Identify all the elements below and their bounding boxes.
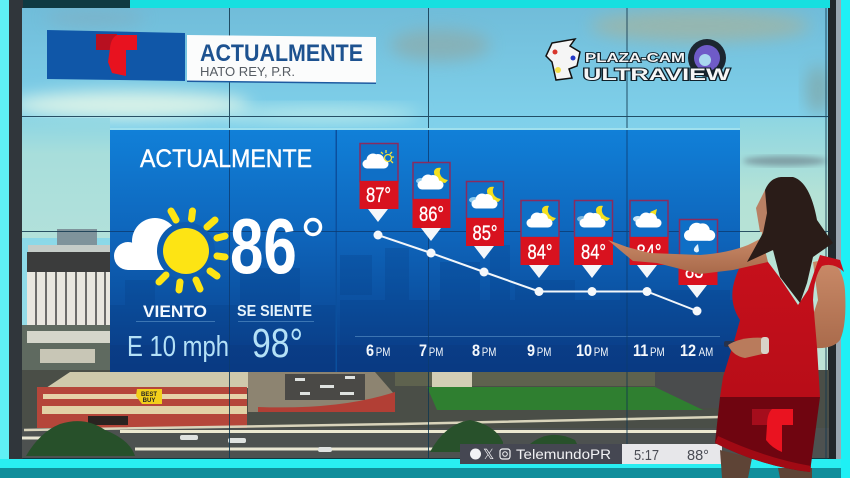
dress lower dark overlay (715, 397, 820, 472)
line chart: hourly temperature (374, 230, 702, 316)
hair (747, 177, 833, 303)
forecast 6 PM (360, 144, 398, 222)
forecast 7 PM: 86° (419, 203, 444, 226)
video wall sky background (22, 8, 828, 370)
lower third ticker (460, 444, 722, 464)
trees (26, 421, 135, 456)
forecast 8 PM (466, 182, 504, 259)
presenter (608, 177, 845, 478)
forecast 9 PM (520, 200, 560, 278)
hour labels: 6PM (366, 342, 390, 360)
forecast 9 PM: 84° (528, 241, 552, 264)
forecast 6 PM: 87° (366, 184, 391, 207)
logo: Plaza-Cam Ultraview (546, 39, 731, 84)
forecast 7 PM (412, 162, 450, 241)
far arm (765, 261, 845, 353)
logo: Telemundo T on dress (752, 409, 793, 452)
title banner: ACTUALMENTE (200, 40, 363, 67)
forecast 11 PM (630, 200, 668, 278)
hour labels: 11PM (633, 342, 665, 360)
hour labels: 9PM (527, 342, 551, 360)
panel: forecast background (110, 128, 740, 372)
current temperature: 86 (230, 202, 297, 290)
feels-like label: SE SIENTE (237, 303, 312, 320)
green field (427, 387, 703, 410)
parking structure (248, 372, 395, 412)
pointing arm (608, 238, 768, 274)
logo: Plaza-Cam Ultraview: ULTRAVIEW (583, 65, 731, 84)
lower third ticker: TelemundoPR (516, 446, 611, 462)
watch (761, 337, 769, 354)
store roof (46, 372, 248, 388)
wind label: VIENTO (143, 302, 207, 321)
face (756, 190, 774, 233)
background city left of panel (22, 229, 110, 375)
hour labels: 7PM (419, 342, 443, 360)
hour labels: 10PM (576, 342, 608, 360)
wind value: E 10 mph (127, 331, 229, 363)
dress upper (720, 242, 844, 397)
degree mark (306, 220, 320, 234)
forecast 12 AM: 83° (685, 260, 710, 283)
hour labels: 12AM (680, 342, 713, 360)
aerial city strip (22, 370, 829, 458)
forecast 8 PM: 85° (472, 222, 498, 245)
title banner (47, 30, 376, 84)
lower third ticker: 88° (687, 447, 709, 464)
best buy sign (136, 389, 162, 404)
lower third ticker: 5:17 (634, 447, 659, 464)
forecast 10 PM (574, 200, 613, 278)
logo: Telemundo T (96, 34, 137, 76)
logo: Plaza-Cam Ultraview: PLAZA-CAM (585, 50, 685, 65)
hand with remote (724, 341, 737, 347)
hour labels: 8PM (472, 342, 496, 360)
neck (760, 225, 782, 252)
title banner: HATO REY, P.R. (200, 64, 295, 79)
lower third ticker: 𝕏 (483, 446, 494, 462)
skyline overlay (110, 245, 740, 372)
forecast 11 PM: 84° (636, 241, 662, 264)
feels-like value: 98° (252, 320, 303, 366)
road (22, 428, 829, 458)
store facade (37, 387, 247, 429)
forecast 10 PM: 84° (581, 241, 606, 264)
best buy sign: BEST (141, 392, 157, 398)
panel heading: Actualmente: ACTUALMENTE (140, 145, 312, 173)
forecast 12 AM (678, 220, 718, 298)
best buy sign: BUY (143, 398, 155, 404)
hour labels (366, 342, 713, 360)
legs (720, 450, 752, 478)
icon: sun and cloud (114, 211, 225, 290)
